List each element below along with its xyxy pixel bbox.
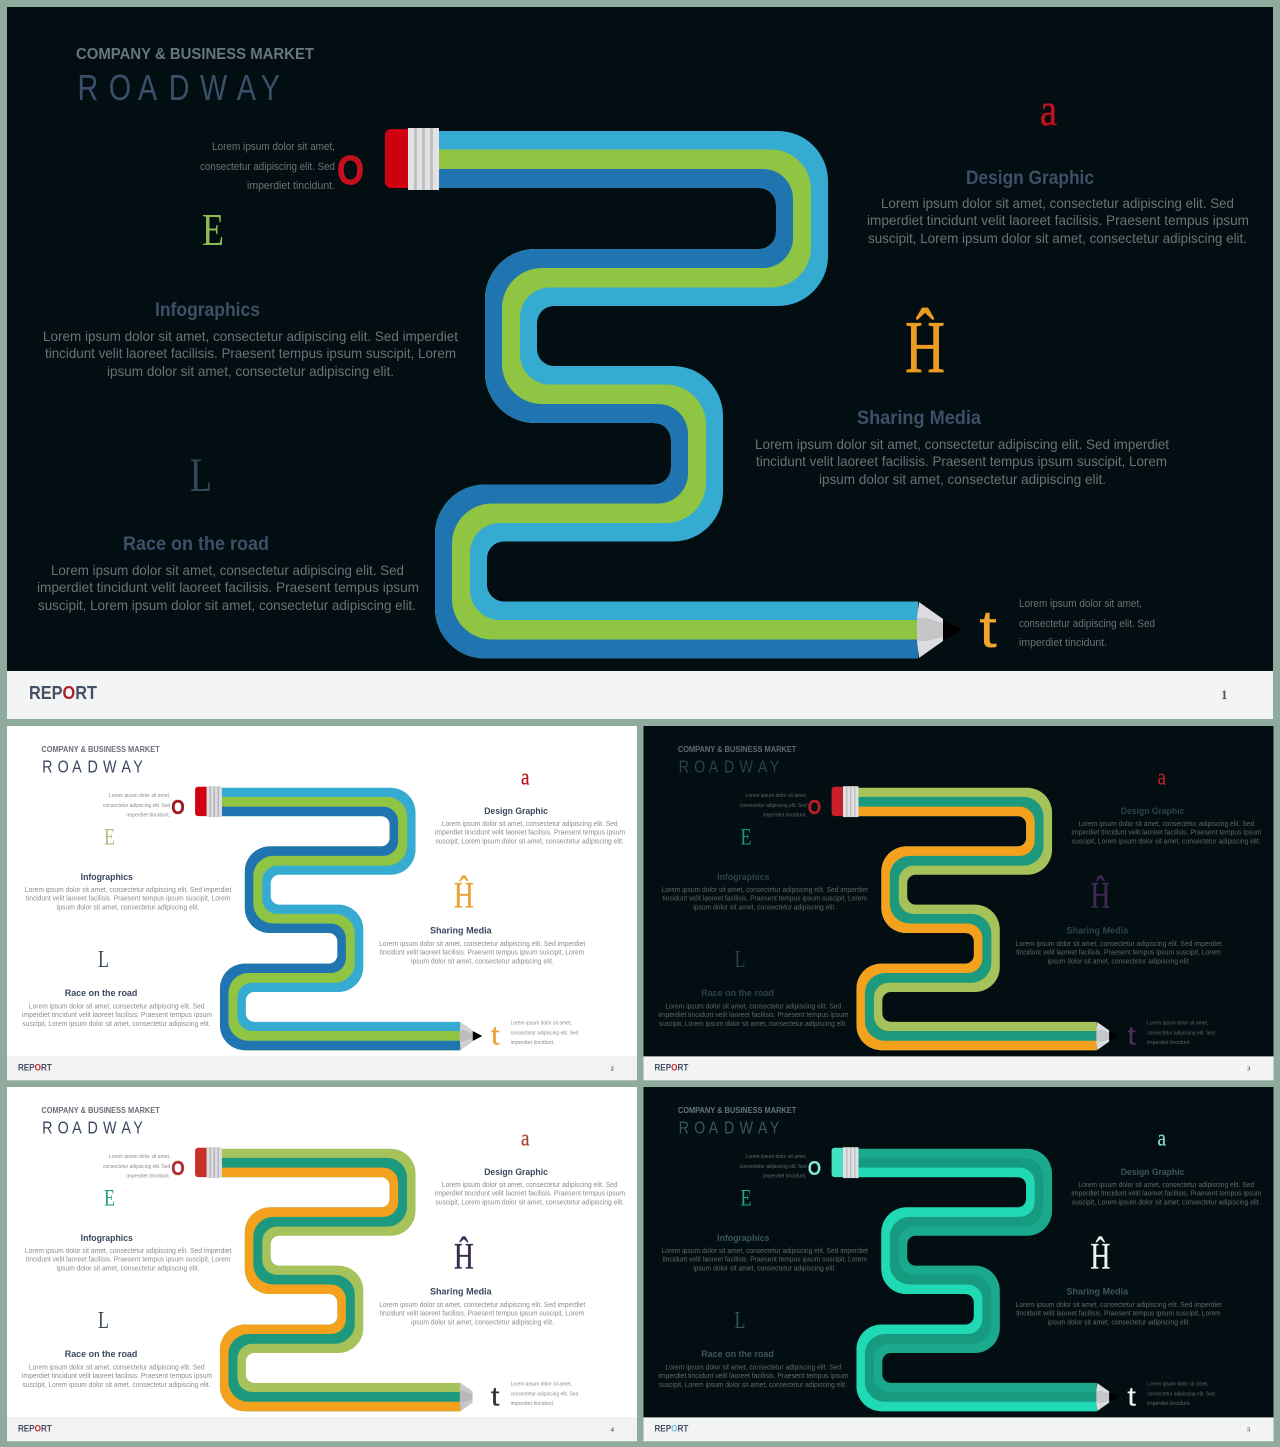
- block: Sharing Media: Lorem ipsum dolor sit amet, consectetur adipiscing elit. Sed imperdiet: [1016, 941, 1222, 948]
- block: Race on the road: Race on the road: [123, 534, 269, 555]
- block: Race on the road: Race on the road: [701, 988, 774, 999]
- title: COMPANY & BUSINESS MARKET: [678, 1106, 796, 1115]
- callout: O: imperdiet tincidunt.: [126, 813, 171, 819]
- pencil tip: [460, 1022, 482, 1050]
- block: Infographics: ipsum dolor sit amet, consectetur adipiscing elit.: [107, 363, 394, 379]
- block: Race on the road: Race on the road: [701, 1349, 774, 1360]
- block: Design Graphic: [867, 84, 1249, 246]
- callout: t: Lorem ipsum dolor sit amet,: [511, 1021, 572, 1027]
- footer bar: 5: [1247, 1426, 1250, 1433]
- footer bar: [7, 671, 1273, 719]
- title: ROADWAY: [42, 1118, 143, 1138]
- block: Race on the road: Lorem ipsum dolor sit amet, consectetur adipiscing elit. Sed: [29, 1004, 205, 1011]
- block: Race on the road: L: [735, 947, 746, 973]
- footer bar: REPORT: [29, 683, 97, 703]
- block: Design Graphic: suscipit, Lorem ipsum dolor sit amet, consectetur adipiscing elit.: [435, 1199, 624, 1206]
- pencil road: [195, 786, 482, 1050]
- callout: O: O: [808, 797, 821, 819]
- block: Design Graphic: imperdiet tincidunt velit laoreet facilisis. Praesent tempus ipsum: [435, 1190, 625, 1197]
- block: Design Graphic: suscipit, Lorem ipsum dolor sit amet, consectetur adipiscing elit.: [435, 838, 624, 845]
- callout: O: consectetur adipiscing elit. Sed: [103, 803, 170, 809]
- title: COMPANY & BUSINESS MARKET: [41, 745, 160, 754]
- block: Design Graphic: Design Graphic: [966, 168, 1094, 189]
- pencil tip: [1096, 1383, 1119, 1411]
- block: Design Graphic: a: [521, 765, 529, 790]
- block: Sharing Media: tincidunt velit laoreet facilisis. Praesent tempus ipsum suscipit, Lorem: [1016, 1310, 1221, 1317]
- block: Design Graphic: Design Graphic: [484, 806, 548, 817]
- block: Sharing Media: Ĥ: [454, 875, 474, 916]
- block: Design Graphic: imperdiet tincidunt velit laoreet facilisis. Praesent tempus ipsum: [1071, 1190, 1262, 1197]
- block: Race on the road: suscipit, Lorem ipsum dolor sit amet, consectetur adipiscing elit.: [22, 1021, 211, 1028]
- block: Design Graphic: Design Graphic: [484, 1167, 548, 1178]
- block: Infographics: Lorem ipsum dolor sit amet, consectetur adipiscing elit. Sed imperdiet: [661, 887, 868, 894]
- block: Race on the road: suscipit, Lorem ipsum dolor sit amet, consectetur adipiscing elit.: [659, 1382, 847, 1389]
- block: Design Graphic: suscipit, Lorem ipsum dolor sit amet, consectetur adipiscing elit.: [1072, 838, 1261, 845]
- callout: t: t: [491, 1020, 500, 1050]
- ferrule: [843, 786, 858, 817]
- block: Design Graphic: a: [1158, 765, 1166, 790]
- block: Design Graphic: Lorem ipsum dolor sit amet, consectetur adipiscing elit. Sed: [1078, 1182, 1254, 1189]
- panel: slide 3, dark orange and teal roadway: [644, 726, 1273, 1080]
- block: Infographics: E: [741, 1185, 751, 1210]
- block: Infographics: ipsum dolor sit amet, consectetur adipiscing elit.: [57, 1266, 200, 1273]
- callout: O: [740, 1154, 821, 1180]
- block: Infographics: Lorem ipsum dolor sit amet, consectetur adipiscing elit. Sed imperdiet: [43, 328, 458, 344]
- block: Race on the road: [37, 449, 419, 613]
- block: Sharing Media: Sharing Media: [1066, 926, 1129, 937]
- callout: O: consectetur adipiscing elit. Sed: [103, 1164, 170, 1170]
- block: Design Graphic: Design Graphic: [1121, 1167, 1184, 1178]
- callout: O: [103, 1154, 185, 1180]
- callout: t: imperdiet tincidunt.: [1147, 1040, 1191, 1046]
- title: [41, 1106, 160, 1138]
- block: Infographics: ipsum dolor sit amet, consectetur adipiscing elit.: [693, 905, 836, 912]
- pencil road: [832, 786, 1119, 1050]
- callout: t: imperdiet tincidunt.: [1147, 1401, 1191, 1407]
- block: Race on the road: imperdiet tincidunt velit laoreet facilisis. Praesent tempus ipsum: [37, 579, 419, 595]
- footer bar: REPORT: [654, 1423, 689, 1433]
- block: Race on the road: Lorem ipsum dolor sit amet, consectetur adipiscing elit. Sed: [665, 1365, 841, 1372]
- title: [41, 745, 160, 777]
- block: Design Graphic: [435, 765, 625, 845]
- block: Infographics: Infographics: [155, 300, 260, 321]
- block: Infographics: ipsum dolor sit amet, consectetur adipiscing elit.: [57, 905, 200, 912]
- pencil road: [195, 1147, 482, 1411]
- block: Infographics: tincidunt velit laoreet facilisis. Praesent tempus ipsum suscipit, Lorem: [45, 345, 456, 361]
- title: ROADWAY: [78, 67, 280, 108]
- title: COMPANY & BUSINESS MARKET: [678, 745, 796, 754]
- block: Sharing Media: Sharing Media: [430, 926, 492, 937]
- block: Infographics: [661, 1185, 868, 1273]
- pencil tip: [460, 1383, 482, 1411]
- callout: t: t: [979, 600, 997, 659]
- block: Design Graphic: suscipit, Lorem ipsum dolor sit amet, consectetur adipiscing elit.: [1072, 1199, 1261, 1206]
- callout: O: consectetur adipiscing elit. Sed: [740, 803, 807, 809]
- pencil tip: [917, 602, 962, 658]
- block: Race on the road: Lorem ipsum dolor sit amet, consectetur adipiscing elit. Sed: [51, 562, 404, 578]
- footer bar: [644, 1417, 1273, 1441]
- block: Race on the road: [22, 1308, 212, 1389]
- block: Design Graphic: Design Graphic: [1121, 806, 1184, 817]
- ferrule: [408, 128, 439, 190]
- title: [76, 46, 314, 108]
- block: Race on the road: imperdiet tincidunt velit laoreet facilisis. Praesent tempus ipsum: [22, 1012, 212, 1019]
- block: Race on the road: [658, 947, 849, 1028]
- block: Race on the road: suscipit, Lorem ipsum dolor sit amet, consectetur adipiscing elit.: [22, 1382, 211, 1389]
- callout: t: [1127, 1020, 1215, 1050]
- block: Race on the road: suscipit, Lorem ipsum dolor sit amet, consectetur adipiscing elit.: [38, 597, 416, 613]
- panel: slide 1, large dark blue and green roadway: [7, 7, 1273, 719]
- block: Sharing Media: Lorem ipsum dolor sit amet, consectetur adipiscing elit. Sed imperdiet: [379, 1302, 585, 1309]
- block: Design Graphic: Lorem ipsum dolor sit amet, consectetur adipiscing elit. Sed: [442, 1182, 618, 1189]
- block: Design Graphic: a: [521, 1126, 529, 1151]
- block: Infographics: tincidunt velit laoreet facilisis. Praesent tempus ipsum suscipit, Lorem: [662, 896, 867, 903]
- block: Sharing Media: Sharing Media: [430, 1287, 492, 1298]
- block: Race on the road: imperdiet tincidunt velit laoreet facilisis. Praesent tempus ipsum: [22, 1373, 212, 1380]
- footer bar: 1: [1221, 687, 1228, 702]
- callout: t: [491, 1381, 578, 1411]
- callout: O: consectetur adipiscing elit. Sed: [200, 161, 335, 173]
- title: ROADWAY: [679, 1118, 780, 1138]
- callout: O: imperdiet tincidunt.: [763, 1174, 807, 1180]
- block: Race on the road: L: [735, 1308, 746, 1334]
- eraser: [195, 787, 210, 816]
- callout: O: imperdiet tincidunt.: [126, 1174, 171, 1180]
- block: Infographics: [661, 824, 868, 912]
- block: Sharing Media: Ĥ: [1090, 1236, 1110, 1277]
- footer bar: 4: [611, 1426, 615, 1433]
- block: Sharing Media: ipsum dolor sit amet, consectetur adipiscing elit.: [1048, 958, 1190, 965]
- title: COMPANY & BUSINESS MARKET: [41, 1106, 160, 1115]
- block: Infographics: tincidunt velit laoreet facilisis. Praesent tempus ipsum suscipit, Lorem: [26, 896, 231, 903]
- callout: t: consectetur adipiscing elit. Sed: [1147, 1392, 1215, 1398]
- block: Sharing Media: Sharing Media: [1066, 1287, 1129, 1298]
- pencil tip: [1096, 1022, 1119, 1050]
- block: Race on the road: Race on the road: [65, 1349, 138, 1360]
- block: Design Graphic: imperdiet tincidunt velit laoreet facilisis. Praesent tempus ipsum: [1071, 829, 1262, 836]
- block: Design Graphic: [1071, 765, 1262, 845]
- block: Infographics: Infographics: [81, 872, 133, 883]
- block: Infographics: Lorem ipsum dolor sit amet, consectetur adipiscing elit. Sed imperdiet: [661, 1248, 868, 1255]
- block: Race on the road: imperdiet tincidunt velit laoreet facilisis. Praesent tempus ipsum: [658, 1373, 849, 1380]
- block: Sharing Media: ipsum dolor sit amet, consectetur adipiscing elit.: [411, 958, 554, 965]
- footer bar: [7, 1056, 637, 1080]
- callout: O: Lorem ipsum dolor sit amet,: [746, 793, 807, 799]
- callout: O: Lorem ipsum dolor sit amet,: [109, 793, 171, 799]
- callout: t: Lorem ipsum dolor sit amet,: [1019, 598, 1142, 610]
- panel: slide 2, white blue and green roadway: [7, 726, 637, 1080]
- footer bar: REPORT: [654, 1062, 689, 1072]
- block: Infographics: Lorem ipsum dolor sit amet, consectetur adipiscing elit. Sed imperdiet: [25, 1248, 231, 1255]
- block: Sharing Media: tincidunt velit laoreet facilisis. Praesent tempus ipsum suscipit, Lorem: [1016, 949, 1221, 956]
- footer bar: REPORT: [18, 1423, 52, 1433]
- callout: O: O: [808, 1158, 821, 1180]
- block: Sharing Media: [1016, 875, 1222, 965]
- block: Sharing Media: [379, 875, 585, 965]
- block: Race on the road: Lorem ipsum dolor sit amet, consectetur adipiscing elit. Sed: [665, 1004, 841, 1011]
- callout: t: t: [1127, 1020, 1137, 1050]
- block: Infographics: [25, 1185, 231, 1273]
- block: Sharing Media: Lorem ipsum dolor sit amet, consectetur adipiscing elit. Sed imperdiet: [379, 941, 585, 948]
- callout: t: consectetur adipiscing elit. Sed: [511, 1392, 578, 1398]
- block: Infographics: E: [741, 824, 751, 849]
- block: Infographics: tincidunt velit laoreet facilisis. Praesent tempus ipsum suscipit, Lorem: [26, 1257, 231, 1264]
- block: Design Graphic: a: [1158, 1126, 1166, 1151]
- panel: slide 5, dark teal roadway: [644, 1087, 1273, 1441]
- block: Sharing Media: Lorem ipsum dolor sit amet, consectetur adipiscing elit. Sed imperdiet: [755, 436, 1169, 452]
- block: Sharing Media: ipsum dolor sit amet, consectetur adipiscing elit.: [411, 1319, 554, 1326]
- footer bar: [644, 1056, 1273, 1080]
- callout: O: [740, 793, 821, 819]
- callout: t: [979, 598, 1155, 659]
- callout: t: consectetur adipiscing elit. Sed: [1019, 618, 1155, 630]
- block: Race on the road: Lorem ipsum dolor sit amet, consectetur adipiscing elit. Sed: [29, 1365, 205, 1372]
- callout: t: Lorem ipsum dolor sit amet,: [511, 1382, 572, 1388]
- title: ROADWAY: [679, 757, 780, 777]
- block: Infographics: Lorem ipsum dolor sit amet, consectetur adipiscing elit. Sed imperdiet: [25, 887, 231, 894]
- pencil road: [832, 1147, 1119, 1411]
- block: Infographics: ipsum dolor sit amet, consectetur adipiscing elit.: [693, 1266, 836, 1273]
- callout: t: t: [491, 1381, 500, 1411]
- callout: O: Lorem ipsum dolor sit amet,: [109, 1154, 171, 1160]
- callout: t: imperdiet tincidunt.: [511, 1040, 555, 1046]
- block: Sharing Media: [1016, 1236, 1222, 1326]
- block: Race on the road: [22, 947, 212, 1028]
- block: Infographics: E: [202, 204, 224, 255]
- eraser: [385, 129, 415, 188]
- block: Race on the road: imperdiet tincidunt velit laoreet facilisis. Praesent tempus ipsum: [658, 1012, 849, 1019]
- block: Infographics: E: [104, 824, 115, 849]
- callout: t: Lorem ipsum dolor sit amet,: [1147, 1021, 1209, 1027]
- block: Design Graphic: [1071, 1126, 1262, 1206]
- block: Sharing Media: [755, 307, 1169, 487]
- footer bar: 2: [611, 1065, 614, 1072]
- block: Infographics: E: [104, 1185, 115, 1210]
- eraser: [832, 787, 847, 816]
- block: Sharing Media: ipsum dolor sit amet, consectetur adipiscing elit.: [819, 471, 1106, 487]
- block: Race on the road: [658, 1308, 849, 1389]
- callout: t: Lorem ipsum dolor sit amet,: [1147, 1382, 1209, 1388]
- callout: t: imperdiet tincidunt.: [1019, 637, 1107, 649]
- title: COMPANY & BUSINESS MARKET: [76, 46, 314, 63]
- title: [678, 745, 796, 777]
- block: Infographics: Infographics: [717, 1233, 769, 1244]
- block: Sharing Media: tincidunt velit laoreet facilisis. Praesent tempus ipsum suscipit, Lorem: [756, 453, 1167, 469]
- block: Sharing Media: tincidunt velit laoreet facilisis. Praesent tempus ipsum suscipit, Lorem: [380, 949, 584, 956]
- block: Design Graphic: a: [1040, 84, 1057, 135]
- block: Race on the road: Race on the road: [65, 988, 138, 999]
- block: Infographics: [43, 204, 458, 379]
- callout: t: [1127, 1381, 1215, 1411]
- pencil road: [385, 128, 962, 658]
- callout: O: O: [171, 1158, 185, 1180]
- callout: O: imperdiet tincidunt.: [763, 813, 807, 819]
- block: Sharing Media: Ĥ: [905, 307, 945, 389]
- callout: O: consectetur adipiscing elit. Sed: [740, 1164, 807, 1170]
- block: Sharing Media: ipsum dolor sit amet, consectetur adipiscing elit.: [1048, 1319, 1190, 1326]
- ferrule: [843, 1147, 858, 1178]
- block: Design Graphic: imperdiet tincidunt velit laoreet facilisis. Praesent tempus ipsum: [435, 829, 625, 836]
- block: Race on the road: L: [98, 947, 109, 973]
- eraser: [195, 1148, 210, 1177]
- footer bar: 3: [1247, 1065, 1250, 1072]
- block: Design Graphic: imperdiet tincidunt velit laoreet facilisis. Praesent tempus ipsum: [867, 212, 1249, 228]
- block: Design Graphic: [435, 1126, 625, 1206]
- block: Infographics: Infographics: [81, 1233, 133, 1244]
- block: Infographics: tincidunt velit laoreet facilisis. Praesent tempus ipsum suscipit, Lorem: [662, 1257, 867, 1264]
- block: Design Graphic: Lorem ipsum dolor sit amet, consectetur adipiscing elit. Sed: [881, 195, 1234, 211]
- callout: O: O: [337, 147, 364, 193]
- callout: t: consectetur adipiscing elit. Sed: [1147, 1031, 1215, 1037]
- ferrule: [207, 1147, 222, 1178]
- block: Design Graphic: suscipit, Lorem ipsum dolor sit amet, consectetur adipiscing elit.: [868, 230, 1247, 246]
- callout: O: Lorem ipsum dolor sit amet,: [746, 1154, 807, 1160]
- title: ROADWAY: [42, 757, 143, 777]
- callout: O: Lorem ipsum dolor sit amet,: [212, 141, 335, 153]
- block: Race on the road: L: [190, 449, 212, 502]
- panel: slide 4, white orange and teal roadway: [7, 1087, 637, 1441]
- block: Sharing Media: Sharing Media: [857, 408, 981, 429]
- block: Sharing Media: tincidunt velit laoreet facilisis. Praesent tempus ipsum suscipit, Lorem: [380, 1310, 584, 1317]
- block: Race on the road: L: [98, 1308, 109, 1334]
- footer bar: [7, 1417, 637, 1441]
- block: Race on the road: suscipit, Lorem ipsum dolor sit amet, consectetur adipiscing elit.: [659, 1021, 847, 1028]
- callout: t: consectetur adipiscing elit. Sed: [511, 1031, 578, 1037]
- callout: t: [491, 1020, 578, 1050]
- block: Sharing Media: Ĥ: [1090, 875, 1110, 916]
- callout: t: t: [1127, 1381, 1137, 1411]
- block: Sharing Media: Ĥ: [454, 1236, 474, 1277]
- callout: O: imperdiet tincidunt.: [247, 180, 335, 192]
- block: Infographics: [25, 824, 231, 912]
- callout: O: [103, 793, 185, 819]
- block: Sharing Media: [379, 1236, 585, 1326]
- title: [678, 1106, 796, 1138]
- callout: t: imperdiet tincidunt.: [511, 1401, 555, 1407]
- footer bar: REPORT: [18, 1062, 52, 1072]
- callout: O: [200, 141, 364, 193]
- block: Infographics: Infographics: [717, 872, 769, 883]
- block: Design Graphic: Lorem ipsum dolor sit amet, consectetur adipiscing elit. Sed: [1078, 821, 1254, 828]
- block: Design Graphic: Lorem ipsum dolor sit amet, consectetur adipiscing elit. Sed: [442, 821, 618, 828]
- ferrule: [207, 786, 222, 817]
- eraser: [832, 1148, 847, 1177]
- block: Sharing Media: Lorem ipsum dolor sit amet, consectetur adipiscing elit. Sed imperdiet: [1016, 1302, 1222, 1309]
- callout: O: O: [171, 797, 185, 819]
